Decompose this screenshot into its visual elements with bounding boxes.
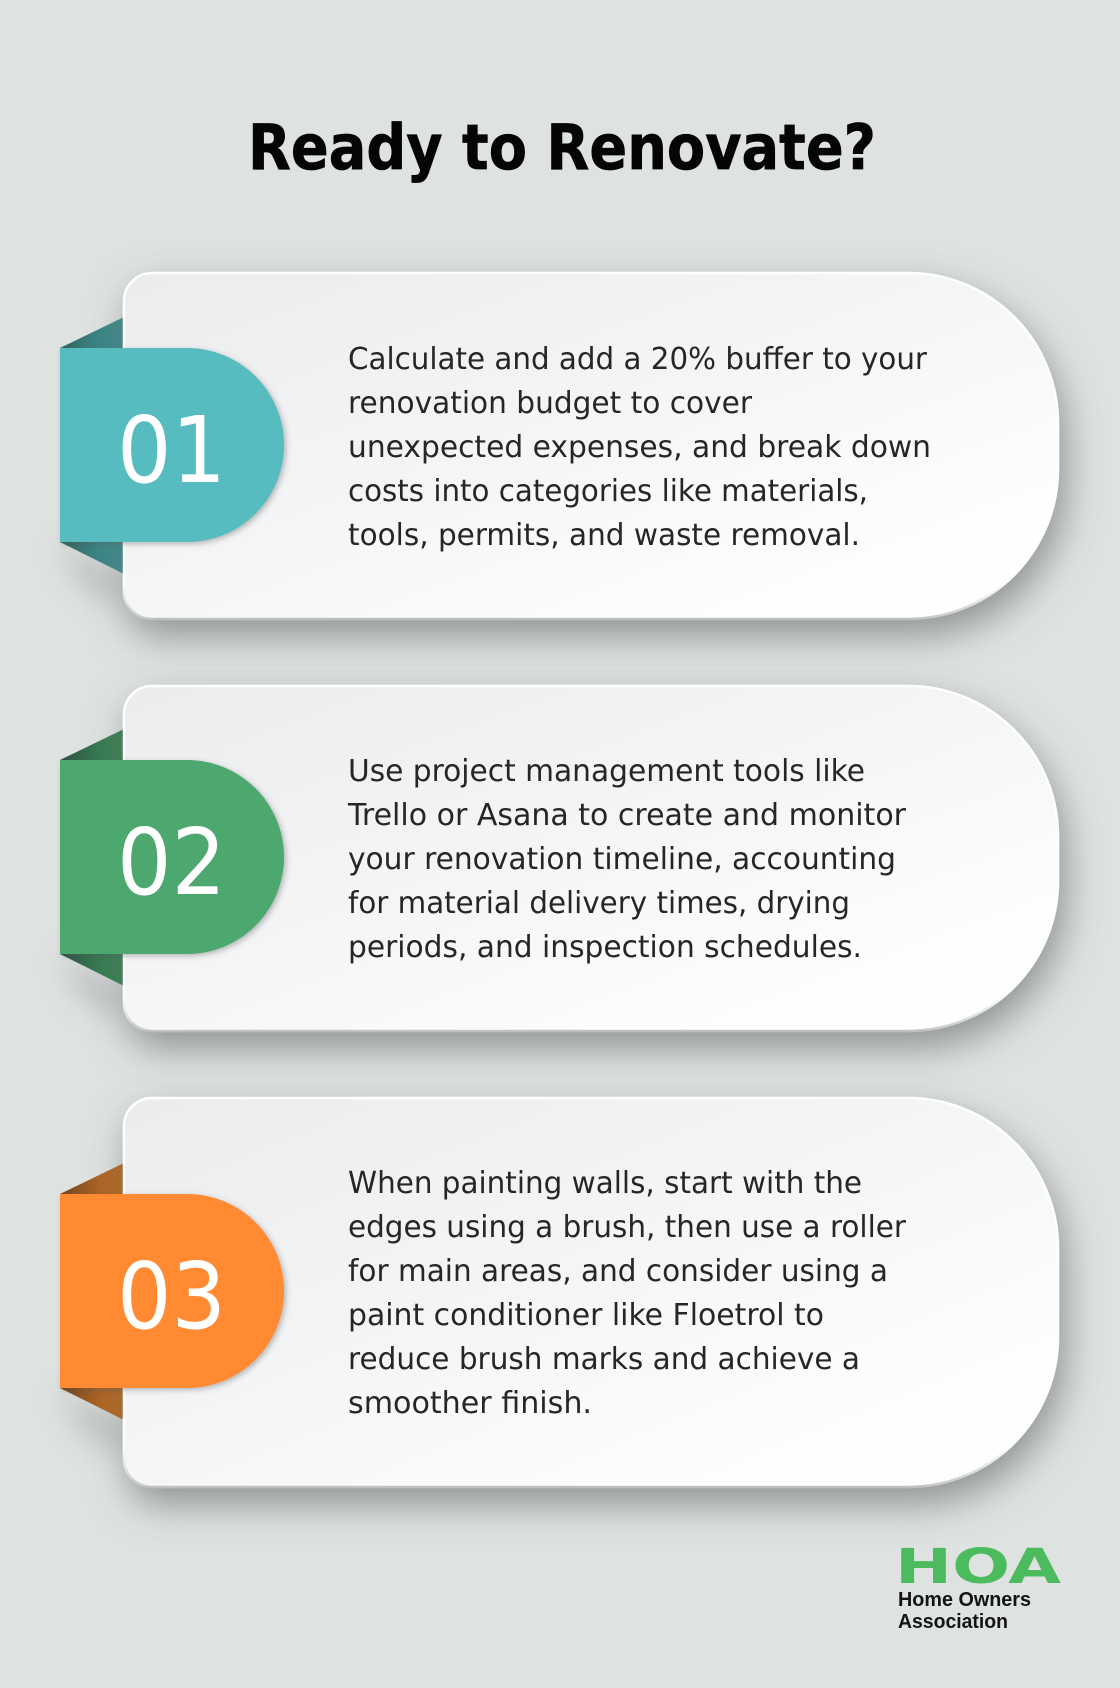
ribbon fold top (60, 729, 124, 760)
body text: costs into categories like materials, (348, 474, 868, 509)
card (124, 1098, 1058, 1487)
body text: renovation budget to cover (348, 386, 753, 421)
body text (347, 754, 907, 965)
body text (348, 1166, 907, 1421)
body text: tools, permits, and waste removal. (348, 518, 860, 553)
number: 03 (117, 1243, 226, 1350)
title: Ready to Renovate? (248, 111, 876, 184)
body text: for material delivery times, drying (348, 886, 850, 921)
number badge (60, 348, 284, 542)
fold shadow (60, 954, 124, 1022)
ribbon fold bottom (60, 542, 124, 574)
number badge (60, 760, 284, 954)
logo text (898, 1589, 1031, 1633)
body text: Trello or Asana to create and monitor (347, 798, 907, 833)
ribbon fold top (60, 1163, 124, 1194)
card (124, 686, 1058, 1031)
logo text: Association (898, 1611, 1008, 1633)
body text: your renovation timeline, accounting (348, 842, 896, 877)
logo mark: HOA (895, 1539, 1061, 1595)
body text: edges using a brush, then use a roller (348, 1210, 907, 1245)
body text: reduce brush marks and achieve a (348, 1342, 860, 1377)
body text: for main areas, and consider using a (348, 1254, 888, 1289)
panel: step 02 (60, 686, 1058, 1031)
fold shadow (60, 1388, 124, 1456)
number badge (60, 1194, 284, 1388)
panel: step 03 (60, 1098, 1058, 1487)
body text: When painting walls, start with the (348, 1166, 862, 1201)
number: 01 (117, 397, 226, 504)
logo: HOA (895, 1539, 1061, 1633)
ribbon fold bottom (60, 954, 124, 986)
number: 02 (117, 809, 226, 916)
body text: unexpected expenses, and break down (348, 430, 931, 465)
body text (348, 342, 931, 553)
body text: smoother finish. (348, 1386, 592, 1421)
body text: paint conditioner like Floetrol to (348, 1298, 824, 1333)
body text: Calculate and add a 20% buffer to your (348, 342, 928, 377)
body text: Use project management tools like (348, 754, 865, 789)
panel: step 01 (60, 273, 1058, 619)
fold shadow (60, 542, 124, 610)
ribbon fold top (60, 317, 124, 348)
logo text: Home Owners (898, 1589, 1031, 1611)
ribbon fold bottom (60, 1388, 124, 1420)
card (124, 273, 1058, 619)
body text: periods, and inspection schedules. (348, 930, 862, 965)
